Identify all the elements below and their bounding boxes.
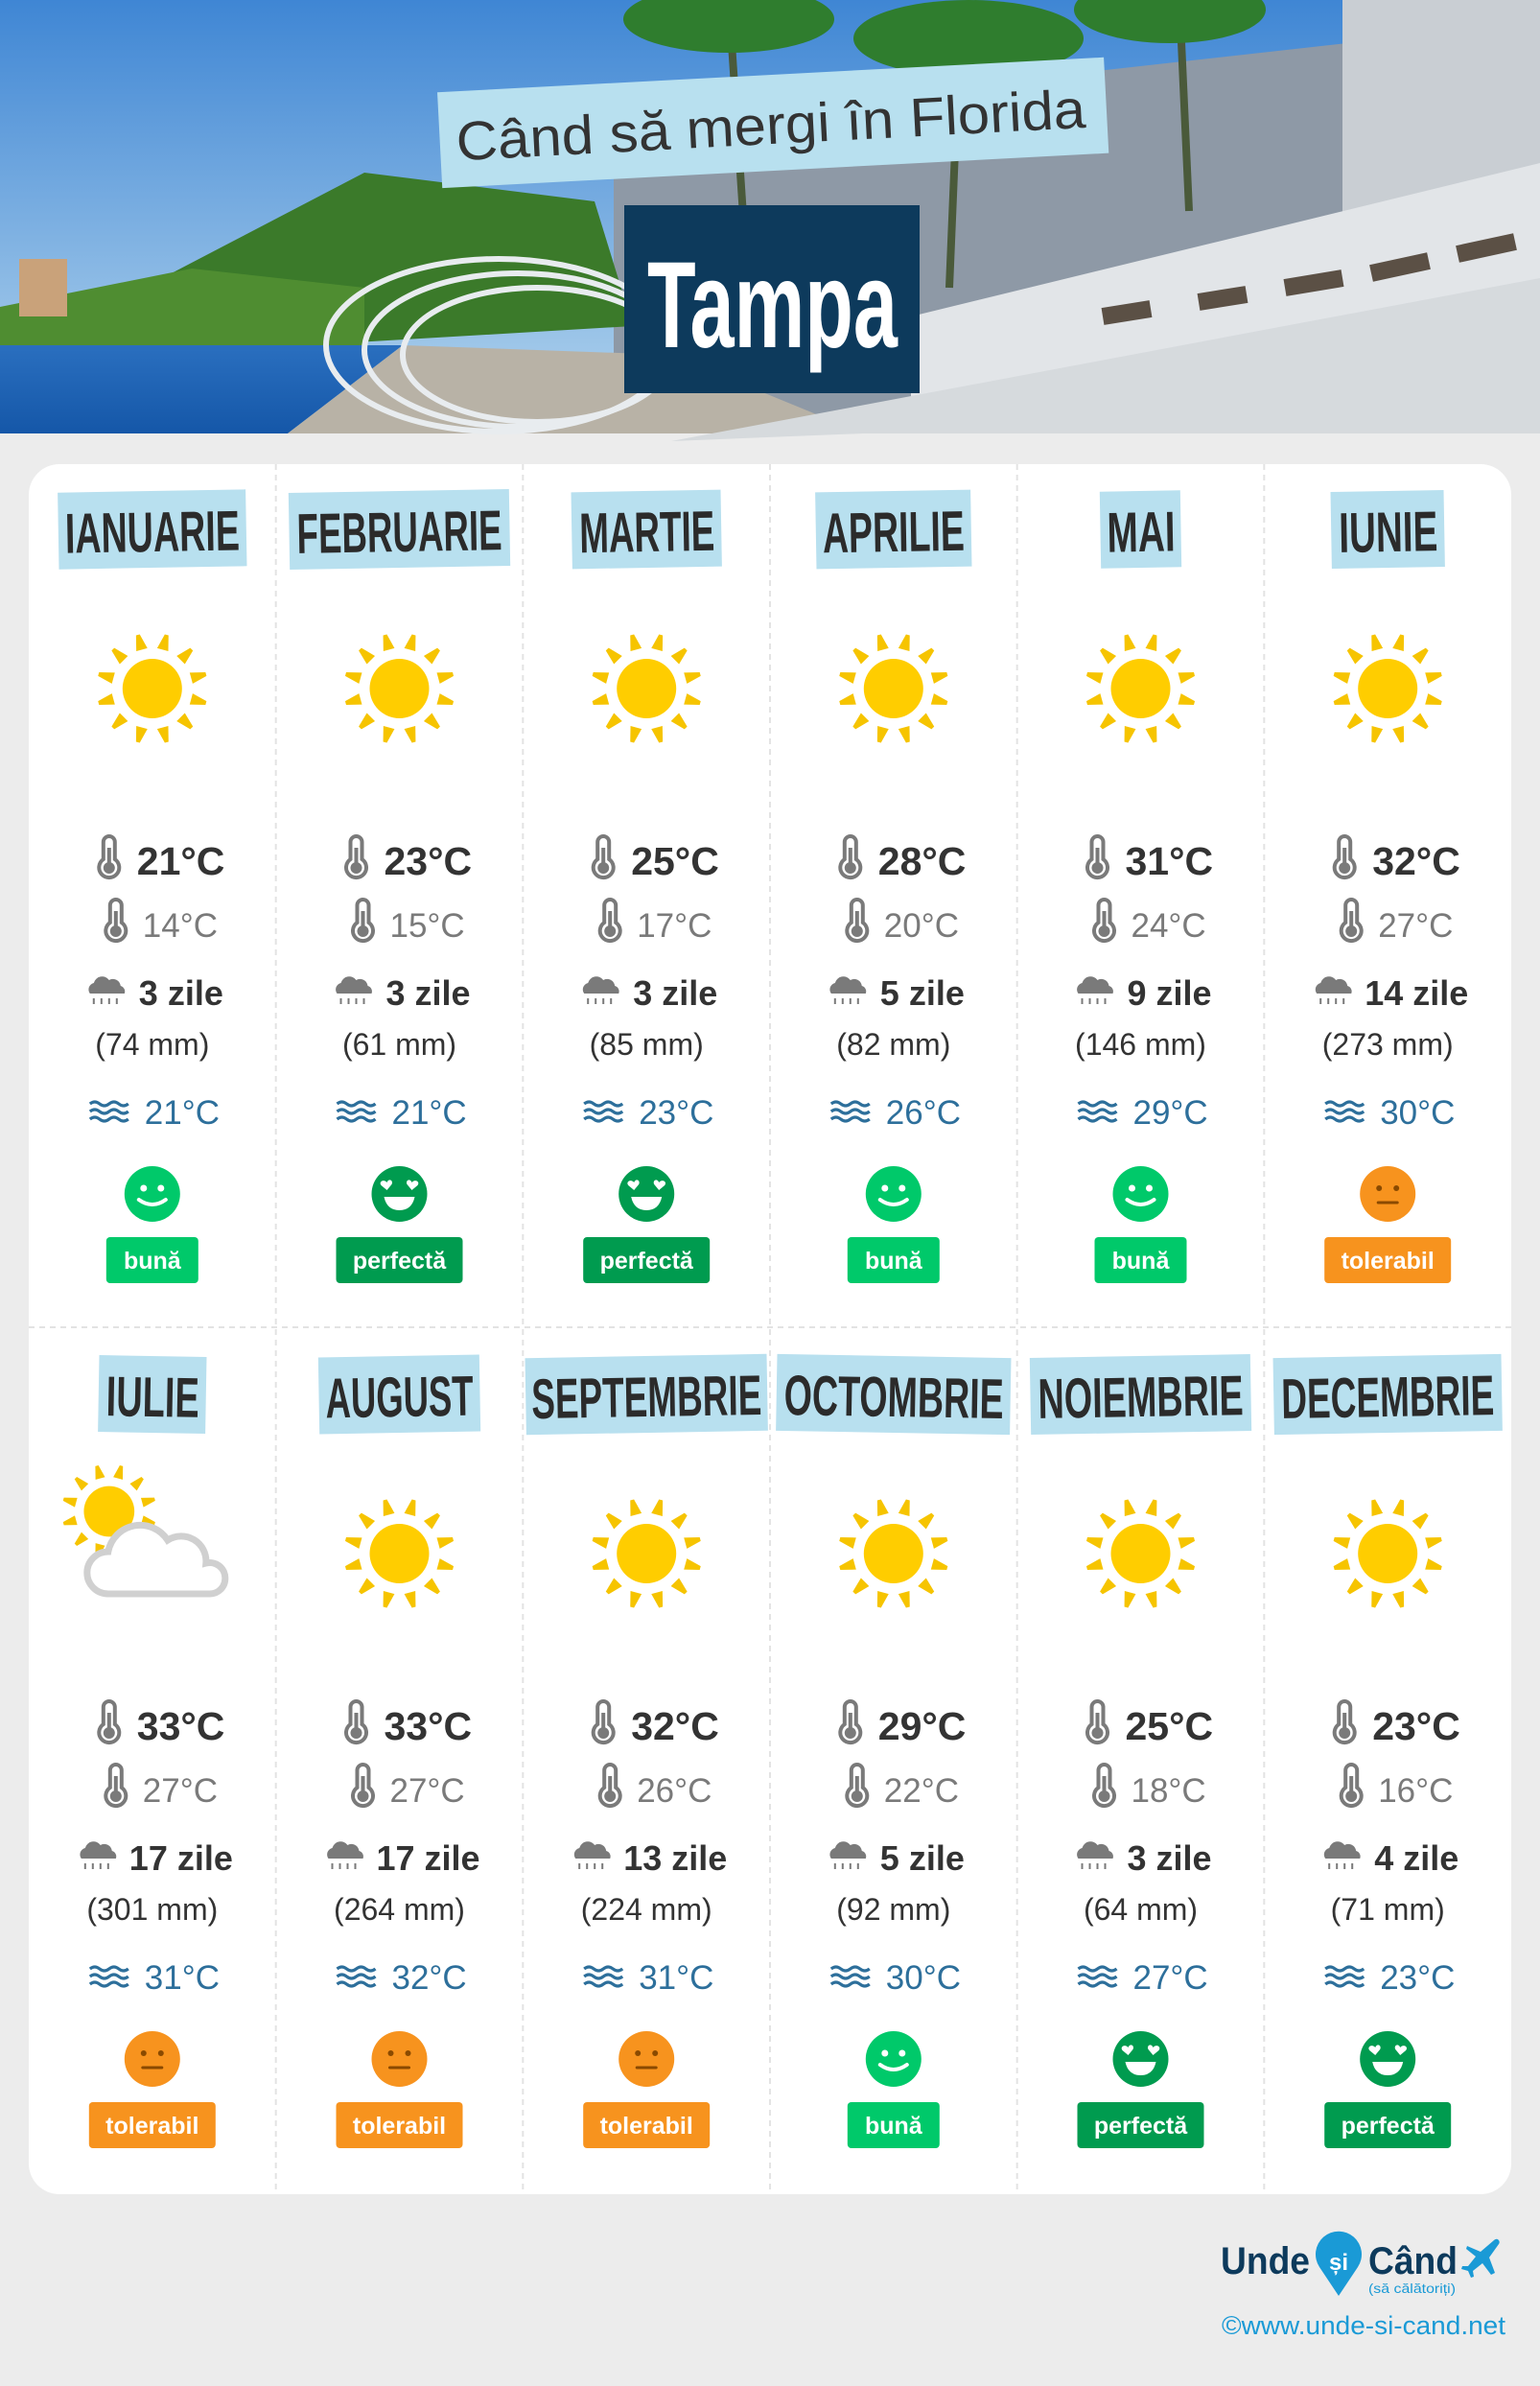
stats: 27°C [143,1772,218,1810]
stats: 32°C [1372,839,1460,883]
rating [336,2031,462,2148]
month label [1331,490,1445,569]
panel: IULIE [62,1355,233,2148]
rating: perfectă [1094,2113,1188,2140]
stats: 3 zile [633,973,717,1013]
stats: 25°C [631,839,719,883]
month label [98,1355,206,1434]
stats: 24°C [1132,907,1206,945]
stats: (273 mm) [1322,1027,1454,1062]
stats: 3 zile [1128,1838,1212,1878]
stats: 14°C [143,907,218,945]
month label: IANUARIE [64,499,240,566]
rating [848,1166,940,1283]
rating [106,1166,198,1283]
icon: sun [1085,633,1196,744]
stats [88,836,224,1132]
month label [572,490,722,569]
stats: 28°C [878,839,966,883]
panel: OCTOMBRIE [776,1354,1011,2148]
icon: sun [1333,1498,1443,1609]
stats [829,1701,966,1997]
stats: 23°C [639,1094,713,1132]
stats: (301 mm) [86,1892,218,1927]
month label [318,1355,480,1434]
stats: 26°C [637,1772,712,1810]
rating: perfectă [353,1248,447,1275]
icon: sun behind cloud [62,1464,225,1594]
panel: DECEMBRIE [1273,1354,1503,2148]
rating: perfectă [600,1248,694,1275]
month label: IULIE [105,1365,199,1430]
stats: 23°C [384,839,472,883]
stats: 21°C [391,1094,467,1132]
title: Când să mergi în Florida [437,58,1108,188]
stats: (64 mm) [1084,1892,1198,1927]
icon: sun [838,633,948,744]
stats [1075,836,1213,1132]
stats: 18°C [1132,1772,1206,1810]
stats: 17°C [637,907,712,945]
icon: sun [1085,1498,1196,1609]
icon: sun [592,1498,702,1609]
panel: FEBRUARIE [289,489,510,1283]
stats: (61 mm) [342,1027,456,1062]
stats: (71 mm) [1331,1892,1445,1927]
stats: 29°C [878,1704,966,1748]
panel: SEPTEMBRIE [525,1354,768,2148]
stats [583,836,719,1132]
rating: tolerabil [1342,1248,1435,1275]
month label: APRILIE [822,500,965,565]
stats: 21°C [137,839,224,883]
icon: sun [344,1498,455,1609]
rating: bună [1112,1248,1170,1275]
stats: 4 zile [1374,1838,1458,1878]
logo: Unde și Când [1221,2232,1500,2296]
stats: 27°C [389,1772,465,1810]
month label [776,1354,1011,1435]
stats: 32°C [631,1704,719,1748]
stats: 31°C [145,1959,220,1997]
stats: 22°C [884,1772,959,1810]
stats: 23°C [1380,1959,1455,1997]
stats: 30°C [1380,1094,1455,1132]
stats: (224 mm) [581,1892,712,1927]
panel: IANUARIE [58,489,246,1283]
stats: 23°C [1372,1704,1460,1748]
month label: OCTOMBRIE [783,1364,1004,1431]
stats: 31°C [639,1959,713,1997]
stats: 15°C [389,907,465,945]
stats: (146 mm) [1075,1027,1206,1062]
stats [327,1701,480,1997]
stats: 25°C [1126,1704,1213,1748]
panel: NOIEMBRIE [1030,1354,1251,2148]
stats [829,836,966,1132]
stats: 5 zile [880,1838,965,1878]
stats: 33°C [384,1704,472,1748]
stats: (85 mm) [590,1027,704,1062]
title: Tampa [624,205,920,393]
stats [336,836,472,1132]
month label [58,489,246,570]
stats [1077,1701,1213,1997]
stats: 21°C [145,1094,220,1132]
stats [574,1701,727,1997]
month label: MAI [1107,500,1176,565]
icon: sun [592,633,702,744]
rating [1095,1166,1187,1283]
stats [80,1701,233,1997]
stats: 14 zile [1365,973,1468,1013]
month label: SEPTEMBRIE [531,1364,762,1431]
footer: website: ©www.unde-si-cand.net [1222,2311,1506,2340]
rating: bună [865,1248,923,1275]
header photo [0,0,1540,441]
rating [583,1166,710,1283]
rating [1324,2031,1451,2148]
stats: 5 zile [880,973,965,1013]
rating: perfectă [1342,2113,1435,2140]
rating: bună [124,1248,182,1275]
rating [1078,2031,1204,2148]
stats: 3 zile [385,973,471,1013]
stats: (92 mm) [836,1892,950,1927]
stats: 20°C [884,907,959,945]
logo: Unde și Când: și [1329,2250,1348,2276]
stats: 27°C [1378,907,1453,945]
month label [289,489,510,570]
month label: FEBRUARIE [296,499,502,566]
month label [525,1354,768,1435]
stats: 17 zile [376,1838,480,1878]
stats: (74 mm) [95,1027,209,1062]
stats: 26°C [886,1094,961,1132]
stats: 33°C [137,1704,224,1748]
stats: 32°C [391,1959,467,1997]
rating [1324,1166,1451,1283]
stats: (264 mm) [334,1892,465,1927]
rating: tolerabil [600,2113,693,2140]
month label: MARTIE [579,500,715,565]
stats: (82 mm) [836,1027,950,1062]
month label [815,490,971,569]
month label: IUNIE [1339,500,1438,565]
rating [89,2031,216,2148]
stats: 29°C [1133,1094,1208,1132]
stats: 30°C [886,1959,961,1997]
panel: IUNIE [1316,490,1468,1283]
rating: tolerabil [353,2113,446,2140]
month label: AUGUST [325,1365,474,1430]
stats: 31°C [1126,839,1213,883]
icon: sun [97,633,207,744]
stats [1324,1701,1460,1997]
logo: Unde și Când: (să călătoriți) [1368,2281,1456,2296]
month label [1100,490,1181,569]
rating: bună [865,2113,923,2140]
month label [1030,1354,1251,1435]
stats: 27°C [1133,1959,1208,1997]
logo: Unde și Când: Unde [1221,2240,1310,2282]
panel: APRILIE [815,490,971,1283]
panel: MAI [1075,490,1213,1283]
rating: tolerabil [105,2113,198,2140]
logo: Unde și Când: Când [1368,2240,1458,2282]
stats [1316,836,1468,1132]
card: monthly weather [29,464,1511,2194]
stats: 3 zile [139,973,223,1013]
icon: sun [838,1498,948,1609]
panel: MARTIE [572,490,722,1283]
title: Tampa: Tampa [647,237,898,374]
rating [336,1166,462,1283]
rating [848,2031,940,2148]
rating [583,2031,710,2148]
stats: 17 zile [129,1838,233,1878]
stats: 16°C [1378,1772,1453,1810]
icon: sun [1333,633,1443,744]
title: Când să mergi în Florida: Când să mergi în Florida [455,79,1087,173]
stats: 13 zile [623,1838,727,1878]
month label: NOIEMBRIE [1038,1364,1244,1431]
panel: AUGUST [318,1355,480,2148]
stats: 9 zile [1128,973,1212,1013]
icon: sun [344,633,455,744]
